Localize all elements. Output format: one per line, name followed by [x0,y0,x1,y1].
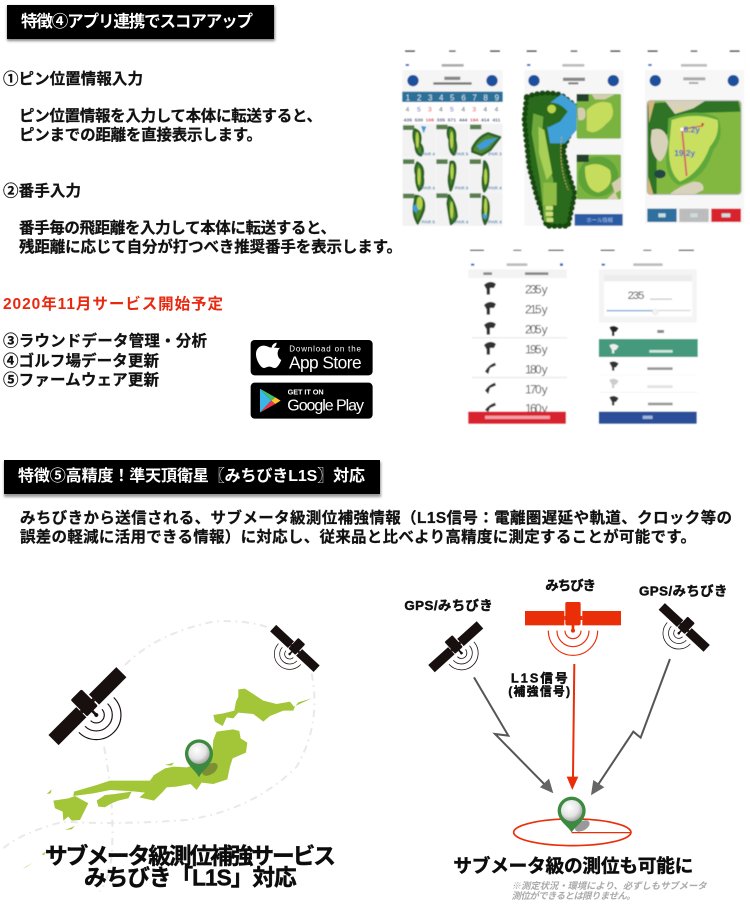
text block: pin position input: ピン位置情報を入力して本体に転送すると、 [19,106,322,125]
location pin on map [185,739,220,778]
left signal arrow [474,677,553,793]
heading: feature 4: 特徴④アプリ連携でスコアアップ [21,12,254,31]
badge: App Store: App Store [289,353,362,373]
app screenshot: club distance list: 195 y [525,342,548,356]
app screenshot: course info [402,47,503,226]
app screenshot: course info: PAR 4 [488,220,502,225]
app screenshot: club distance list: 160 y [525,402,548,416]
signal label: L1S信号 [511,672,568,686]
text block: Michibiki description: みちびきから送信される、サブメータ級測位補強情報（L1S信号：電離圏遅延や軌道、クロック等の [20,508,732,527]
app screenshot: course info: 4 5 3 4 5 4 3 4 4 [406,106,499,113]
heading: feature 5: 特徴⑤高精度！準天頂衛星〖みちびきL1S〗対応 [18,466,365,485]
app screenshot: club distance list: 235 y [525,282,548,296]
app screenshot: club distance setting [599,247,698,424]
accuracy circle [514,819,631,846]
left satellite [424,617,497,687]
caption: みちびき「L1S」対応 [84,864,297,890]
text block: Michibiki description [20,508,732,546]
map of Japan [23,689,312,869]
text block: pin position input: ピンまでの距離を直接表示します。 [19,125,262,144]
app screenshot: course info: 335 [437,118,445,124]
app screenshot: club distance list: 180 y [525,362,548,376]
text block: other features [3,331,207,389]
text block: club number input: 番手毎の飛距離を入力して本体に転送すると、 [19,218,336,237]
badge: Google Play [251,383,373,419]
caption: サブメータ級の測位も可能に [453,855,693,876]
text block: club number input: 残距離に応じて自分が打つべき推奨番手を表示します。 [19,237,402,256]
app screenshot: course info: 411 [492,118,501,124]
heading: feature 4 [7,5,275,41]
right satellite [646,599,714,666]
app screenshot: course info: 444 [459,118,468,124]
centre red satellite [525,602,621,655]
badge: App Store [251,340,373,375]
heading: feature 5 [4,460,381,497]
app screenshot: course info: 414 [481,118,490,124]
app screenshot: course info: 530 [415,118,423,124]
app screenshot: course info: PAR 5 [455,186,469,191]
signal label: (補強信号) [508,684,570,698]
app screenshot: course info: 123456789 [406,94,500,103]
app screenshot: hole introduction [524,47,624,226]
app screenshot: course info: PAR 3 [488,151,502,156]
badge: Google Play: GET IT ON [288,388,324,397]
app screenshot: course info: PAR 5 [422,220,435,225]
app screenshot: course info: PAR 4 [455,220,469,225]
caption [45,843,336,890]
app screenshot: hole introduction: ホール情報 [586,216,614,224]
text block: pin position input [3,69,322,144]
satellite labels: みちびき [545,578,596,593]
red notice: service start: 2020年11月サービス開始予定 [3,294,223,313]
caption: サブメータ級測位補強サービス [45,843,336,869]
location pin [558,797,592,834]
satellite labels: GPS/みちびき [404,598,493,613]
centre signal arrow [567,664,578,790]
large satellite [42,661,148,766]
app screenshot: pin position input [645,47,744,223]
app screenshot: club distance list: 170 y [525,382,548,396]
satellite labels [404,578,727,613]
text block: other features: ⑤ファームウェア更新 [3,371,159,389]
badge: App Store: Download on the [289,345,362,354]
app screenshot: course info: PAR 5 [455,151,469,156]
right signal arrow [591,659,670,795]
app screenshot: club distance setting: 235 [628,290,644,302]
text block: Michibiki description: 誤差の軽減に活用できる情報）に対応し、従来品と比べより高精度に測定することが可能です。 [20,527,696,546]
text block: club number input: ②番手入力 [3,181,81,200]
footnote [512,880,707,901]
footnote: 測位ができるとは限りません。 [512,890,636,901]
footnote: ※測定状況・環境により、必ずしもサブメータ [512,880,707,891]
app screenshot: course info: PAR 4 [422,151,435,156]
satellite labels: GPS/みちびき [639,583,727,598]
app screenshot: pin position input: 19.2y [674,148,696,158]
small satellite [257,621,323,686]
app screenshot: course info: 435 [404,118,412,124]
app screenshot: club distance list [468,247,567,424]
app screenshot: course info: PAR 4 [488,186,502,191]
app screenshot: club distance list: 205 y [525,322,548,336]
diagram: L1S signal [404,578,727,901]
badge: Google Play: Google Play [287,398,364,415]
text block: other features: ④ゴルフ場データ更新 [3,351,159,370]
app screenshot: course info: 106 [426,118,434,124]
signal label [508,672,570,698]
app screenshot: course info: PAR 4 [422,186,435,191]
app screenshot: course info: 571 [448,118,456,124]
text block: pin position input: ①ピン位置情報入力 [3,69,143,88]
app screenshot: pin position input: 8.2y [684,124,700,134]
app screenshot: club distance list: 215 y [525,302,548,316]
text block: other features: ③ラウンドデータ管理・分析 [3,331,207,350]
text block: club number input [3,181,402,256]
app screenshot: course info: 194 [470,118,479,124]
diagram: satellites over Japan map [3,621,336,892]
